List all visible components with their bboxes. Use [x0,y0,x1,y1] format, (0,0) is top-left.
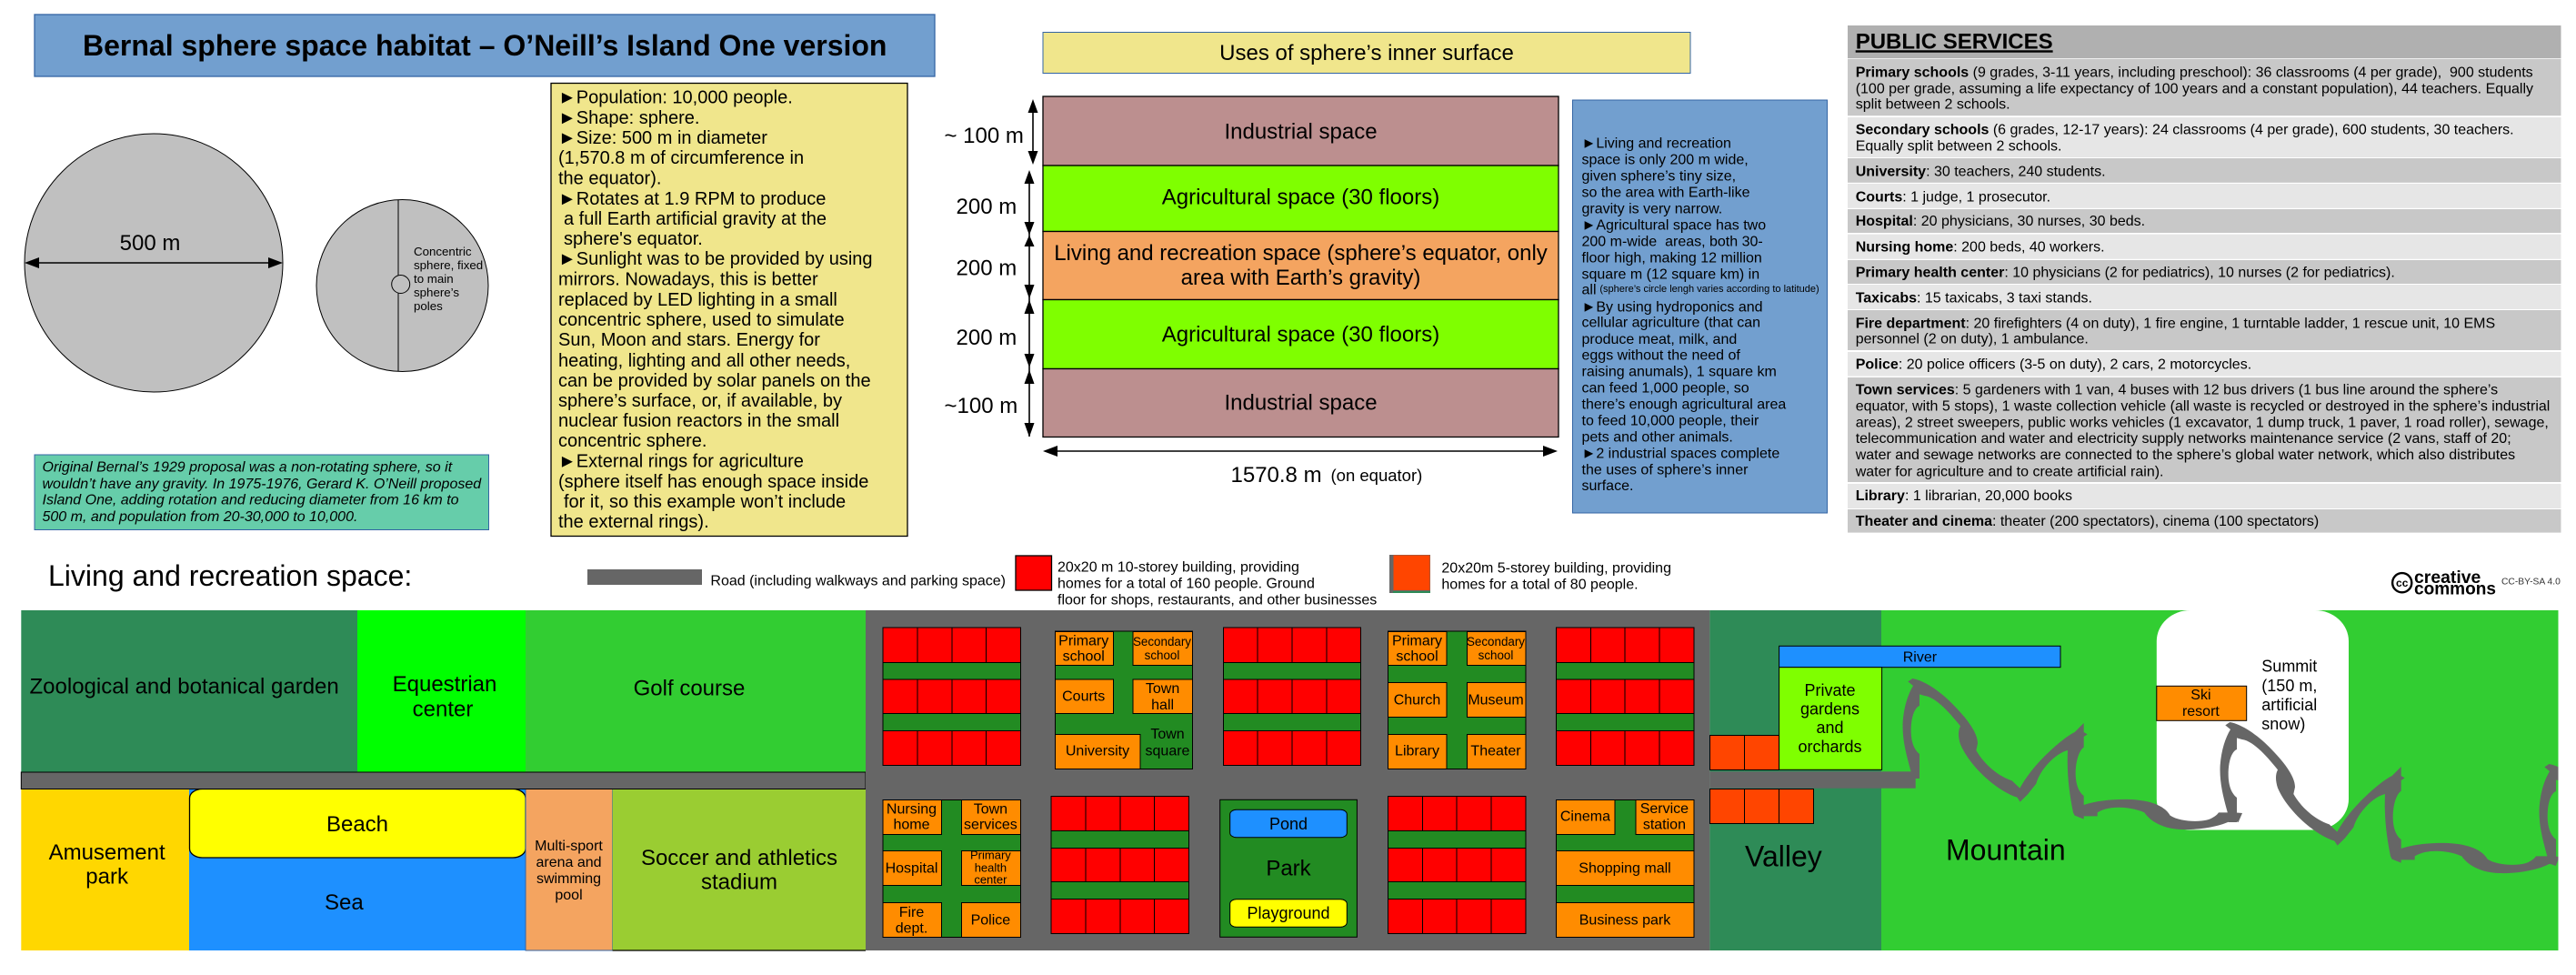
city block: services bottom 5: station [1643,818,1686,833]
legend: 5-storey building: homes for a total of 80 people. [1441,577,1639,592]
panel: key facts: ►Sunlight was to be provided by using [558,249,873,269]
chart: surface bands: Industrial space [1224,391,1378,416]
city block: services top 4: school [1396,649,1438,665]
panel: surface notes: floor high, making 12 million [1582,251,1762,266]
city block: services bottom 1: Police [971,913,1010,929]
private gardens and orchards: and [1816,719,1844,737]
map zone: soccer and athletics stadium: stadium [701,870,777,895]
panel: key facts: mirrors. Nowadays, this is better [558,270,818,290]
chart: surface bands: area with Earth’s gravity) [1181,266,1420,290]
map zone: sea and beach: Sea [325,890,364,915]
note: history of the proposal: 500 m, and population from 20-30,000 to 10,000. [42,509,357,525]
city block: services bottom 1: home [893,818,930,833]
table: public services: Nursing home: 200 beds, 40 workers. [1856,239,2105,255]
map zone: valley [1709,610,1881,950]
city block: services top 2: Courts [1062,689,1105,705]
map zone: multi-sport arena [526,789,613,950]
panel: key facts: ►Rotates at 1.9 RPM to produce [558,189,826,209]
map zone: equestrian center [357,610,526,772]
river: River [1903,649,1938,665]
panel: key facts: (sphere itself has enough space inside [558,472,868,492]
valley housing: 5-storey buildings [1709,735,1814,823]
city block: services top 2: school [1063,649,1105,665]
map zone: amusement park [21,789,189,950]
chart: surface bands: Industrial space [1224,120,1378,144]
map zone: summit: snow) [2261,715,2305,733]
diagram: concentric sphere: to main [414,272,454,286]
map: winding mountain road [1709,678,2559,873]
city block: services bottom 1: services [964,818,1017,833]
city block: services bottom 1: center [974,873,1007,887]
diagram: sphere 500 m diameter: 500 m [120,231,180,256]
city block: housing top 1 [883,628,1020,765]
panel: surface notes: cellular agriculture (that can [1582,315,1760,331]
table: public services: (100 per grade, assuming a life expectancy of 100 years and a constant population), 44 teachers. Equally [1856,81,2533,96]
city block: services bottom 5: Cinema [1560,809,1610,825]
city block: services bottom 1: Fire [899,905,924,920]
panel: key facts: replaced by LED lighting in a small [558,290,837,310]
city block: services bottom 5 [1557,799,1694,937]
table: public services: Courts: 1 judge, 1 prosecutor. [1856,189,2050,205]
legend: 10-storey building: floor for shops, restaurants, and other businesses [1057,592,1377,608]
panel: surface notes: there’s enough agricultural area [1582,397,1786,412]
diagram: concentric sphere: Concentric [414,245,472,258]
logo: creative commons licence: commons [2414,578,2496,598]
legend: 5-storey building: 20x20m 5-storey building, providing [1441,560,1671,576]
table: public services: Equally split between 2 schools. [1856,138,2061,154]
map zone: zoological and botanical garden: Zoological and botanical garden [29,675,339,699]
panel: key facts: the equator). [558,169,661,189]
panel: key facts: ►Shape: sphere. [558,108,699,128]
map zone: soccer and athletics stadium: Soccer and athletics [641,846,837,870]
map zone: multi-sport arena: swimming [536,871,601,887]
city block: services top 4: school [1478,648,1513,662]
city block: services top 4 [1388,631,1526,769]
panel: surface notes: ►Agricultural space has two [1582,218,1766,233]
panel: surface notes: raising anumals), 1 square km [1582,365,1777,380]
panel: surface notes: surface. [1582,478,1633,494]
panel: key facts: can be provided by solar panels on the [558,371,871,391]
legend: 10-storey building [1016,556,1377,608]
city block: services top 4: Museum [1468,693,1524,709]
table: public services: water for agriculture and to create artificial rain). [1855,464,2164,479]
panel: surface notes: ►Living and recreation [1582,136,1731,152]
panel: key facts: sphere's equator. [564,229,703,249]
city block: services top 2: hall [1151,698,1174,713]
map: road [21,772,866,789]
note: history of the proposal: Original Bernal’s 1929 proposal was a non-rotating sphere, so it [42,460,453,476]
city block: services bottom 1: health [975,861,1007,875]
table: public services: PUBLIC SERVICES [1856,29,2053,54]
city block: services top 4: Library [1395,744,1439,759]
vertical dimension arrows [1024,99,1038,437]
table: public services [1848,25,2561,533]
heading: uses of inner surface [1043,33,1690,73]
city block: services top 2 [1055,631,1193,769]
horizontal arrow: equator length: 1570.8 m [1231,463,1322,488]
logo: creative commons licence: cc [2396,577,2409,589]
panel: surface notes: 200 m-wide areas, both 30- [1582,234,1763,249]
table: public services: areas), 2 street sweepers, public works vehicles (1 excavator, 1 dump truck, 1 paver, 1 road roller), sewage, [1856,415,2549,430]
dimension labels: 200 m [957,326,1017,350]
dimension labels: 200 m [957,256,1017,281]
city block: services bottom 5: Service [1640,801,1689,817]
panel: key facts: ►Population: 10,000 people. [558,88,793,108]
map zone: summit: artificial [2261,696,2317,714]
panel: key facts: the external rings). [558,512,709,532]
panel: surface notes: to feed 10,000 people, their [1582,413,1759,428]
city block: housing top 5 [1557,628,1694,765]
table: public services: Fire department: 20 firefighters (4 on duty), 1 fire engine, 1 turntable ladder, 1 rescue unit, 10 EMS [1856,316,2495,331]
map zone: golf course [526,610,866,772]
panel: key facts: sphere’s surface, or, if available, by [558,391,842,411]
private gardens and orchards [1779,668,1882,769]
title [35,15,935,76]
table: public services: Hospital: 20 physicians, 30 nurses, 30 beds. [1856,214,2145,229]
panel: key facts: Sun, Moon and stars. Energy for [558,330,820,350]
panel: key facts: nuclear fusion reactors in the small [558,411,839,431]
map zone: sea and beach [189,789,526,950]
table: public services: University: 30 teachers, 240 students. [1856,164,2106,179]
map zone: amusement park: Amusement [49,840,165,865]
city block: services top 2: Town [1150,727,1185,742]
panel: key facts: concentric sphere. [558,431,707,451]
diagram: concentric sphere: sphere’s [414,286,459,299]
city block: services top 2: University [1066,744,1129,759]
table: public services: split between 2 schools. [1856,96,2010,113]
panel: surface notes: can feed 1,000 people, so [1582,380,1749,397]
map zone: summit: (150 m, [2261,677,2317,695]
diagram: concentric sphere: sphere, fixed [414,258,483,272]
panel: key facts: concentric sphere, used to simulate [558,310,845,330]
city block: housing bottom 4 [1388,796,1526,934]
city block: park: Park [1266,857,1312,881]
panel: surface notes: pets and other animals. [1582,430,1733,446]
chart: surface bands: Agricultural space (30 floors) [1162,322,1439,347]
panel: surface notes: space is only 200 m wide, [1582,153,1749,167]
map zone: mountain [1881,610,2559,950]
legend: 10-storey building: homes for a total of 160 people. Ground [1057,576,1315,591]
city block: services top 2: Secondary [1133,635,1191,648]
panel: surface notes: ►By using hydroponics and [1582,299,1763,315]
heading: uses of inner surface: Uses of sphere’s inner surface [1219,41,1514,65]
city block: services top 2: Primary [1058,633,1108,648]
private gardens and orchards: Private [1804,681,1856,699]
panel: surface notes: square m (12 square km) in [1582,267,1759,283]
map zone: valley: Valley [1745,840,1822,873]
table: public services: telecommunication and water and electricity supply networks maintenance service (2 vans, staff of 20; [1856,431,2511,447]
dimension labels: ~100 m [944,394,1017,418]
table: public services: equator, with 5 stops), 1 waste collection vehicle (all waste is recycled or destroyed in the sphere’s industrial [1856,398,2550,414]
panel: surface notes: (sphere’s circle lengh varies according to latitude) [1599,284,1819,295]
panel: surface notes: the uses of sphere’s inner [1582,462,1749,477]
panel: key facts: (1,570.8 m of circumference in [558,148,804,168]
table: public services: Primary health center: 10 physicians (2 for pediatrics), 10 nurses (2 for pediatrics). [1856,265,2395,280]
title: Bernal sphere space habitat – O’Neill’s Island One version [83,29,887,62]
city block: services bottom 1: dept. [896,920,927,936]
city block: services bottom 1: Hospital [886,860,937,876]
chart: surface bands [1043,96,1559,437]
note: history of the proposal: wouldn’t have any gravity. In 1975-1976, Gerard K. O’Neill proposed [42,477,482,492]
logo: creative commons licence: CC-BY-SA 4.0 [2501,578,2561,588]
panel: key facts: ►Size: 500 m in diameter [558,128,767,148]
ski resort: Ski [2190,688,2211,703]
dimension labels: 200 m [957,195,1017,219]
panel: surface notes: so the area with Earth-like [1582,186,1750,201]
chart: surface bands: Living and recreation space (sphere’s equator, only [1054,241,1548,266]
diagram: concentric sphere [316,200,488,371]
city block: services bottom 1: Nursing [887,801,937,817]
city block: services top 2: school [1145,648,1179,662]
city block: park: Pond [1269,815,1308,833]
private gardens and orchards: gardens [1800,699,1859,718]
panel: surface notes [1573,100,1828,513]
note: history of the proposal: Island One, adding rotation and reducing diameter from 16 km to [42,493,459,508]
panel: surface notes: given sphere’s tiny size, [1582,168,1736,184]
table: public services: Secondary schools (6 grades, 12-17 years): 24 classrooms (4 per grade), 600 students, 30 teachers. [1856,122,2514,138]
river [1779,646,2060,668]
city block: housing bottom 2 [1051,796,1189,934]
panel: surface notes: gravity is very narrow. [1582,202,1722,217]
panel: surface notes: produce meat, milk, and [1582,332,1737,347]
city block: park [1220,799,1357,937]
city block: services top 2: square [1146,743,1190,759]
logo: creative commons licence [2392,568,2561,598]
panel: key facts [551,84,907,537]
legend: road [587,569,1006,588]
map zone: mountain: Mountain [1946,833,2066,866]
ski resort [2157,686,2247,720]
panel: key facts: a full Earth artificial gravity at the [564,209,827,229]
map zone: equestrian center: Equestrian [393,672,496,697]
map zone: summit: Summit [2261,658,2317,676]
city block: services top 4: Theater [1470,744,1521,759]
heading: living and recreation space: Living and recreation space: [48,559,412,592]
diagram: concentric sphere: poles [414,299,443,313]
map zone: zoological and botanical garden [21,610,357,772]
map zone: soccer and athletics stadium [613,789,866,950]
table: public services: Town services: 5 gardeners with 1 van, 4 buses with 12 bus drivers (1 bus line around the sphere’s [1856,382,2498,398]
map zone: golf course: Golf course [634,677,745,701]
panel: key facts: ►External rings for agriculture [558,452,804,472]
horizontal arrow: equator length: (on equator) [1331,466,1422,485]
map zone: amusement park: park [85,865,129,890]
table: public services: Library: 1 librarian, 20,000 books [1856,488,2072,504]
horizontal arrow: equator length [1043,446,1558,488]
city block: services bottom 1: Town [974,801,1007,817]
city block: park: Playground [1247,904,1330,922]
map zone: multi-sport arena: Multi-sport [535,839,603,854]
city block: services bottom 1: Primary [970,849,1011,862]
private gardens and orchards: orchards [1798,738,1862,756]
legend: 10-storey building: 20x20 m 10-storey building, providing [1057,559,1299,575]
map zone: equestrian center: center [413,698,473,722]
map zone: multi-sport arena: pool [555,888,583,903]
map zone: multi-sport arena: arena and [536,855,602,870]
table: public services: personnel (2 on duty), 1 ambulance. [1856,331,2089,347]
table: public services: Police: 20 police officers (3-5 on duty), 2 cars, 2 motorcycles. [1856,357,2251,373]
dimension labels [944,124,1024,418]
map zone: summit [2157,610,2349,829]
table: public services: Theater and cinema: theater (200 spectators), cinema (100 spectators) [1856,514,2319,529]
legend: 5-storey building [1389,555,1671,593]
city block: services top 4: Secondary [1467,635,1525,648]
chart: surface bands: Agricultural space (30 floors) [1162,186,1439,209]
table: public services: Taxicabs: 15 taxicabs, 3 taxi stands. [1856,290,2092,306]
table: public services: water and sewage networks are connected to the sphere’s global water network, which also distributes [1855,447,2515,463]
city block: services bottom 5: Business park [1579,913,1671,929]
city block: services bottom 1 [883,799,1020,937]
city block: services top 4: Church [1394,693,1440,709]
ski resort: resort [2182,704,2220,719]
panel: surface notes: ►2 industrial spaces complete [1582,446,1779,462]
panel: key facts: heating, lighting and all other needs, [558,351,850,371]
city block: services bottom 5: Shopping mall [1579,860,1671,876]
map zone: city grey area [866,610,1709,950]
city block: housing top 3 [1223,628,1361,765]
diagram: sphere 500 m diameter [25,134,283,392]
panel: surface notes: eggs without the need of [1582,348,1740,364]
map zone: sea and beach: Beach [326,812,388,837]
panel: surface notes: all [1582,283,1597,298]
city block: services top 4: Primary [1392,633,1442,648]
table: public services: Primary schools (9 grades, 3-11 years, including preschool): 36 classrooms (4 per grade), 900 students [1856,65,2533,80]
legend: road: Road (including walkways and parking space) [710,573,1006,588]
panel: key facts: for it, so this example won’t include [564,492,846,512]
note: history of the proposal [35,455,489,529]
logo: creative commons licence: creative [2414,568,2481,588]
city block: services top 2: Town [1146,681,1179,697]
dimension labels: ~ 100 m [944,124,1024,148]
